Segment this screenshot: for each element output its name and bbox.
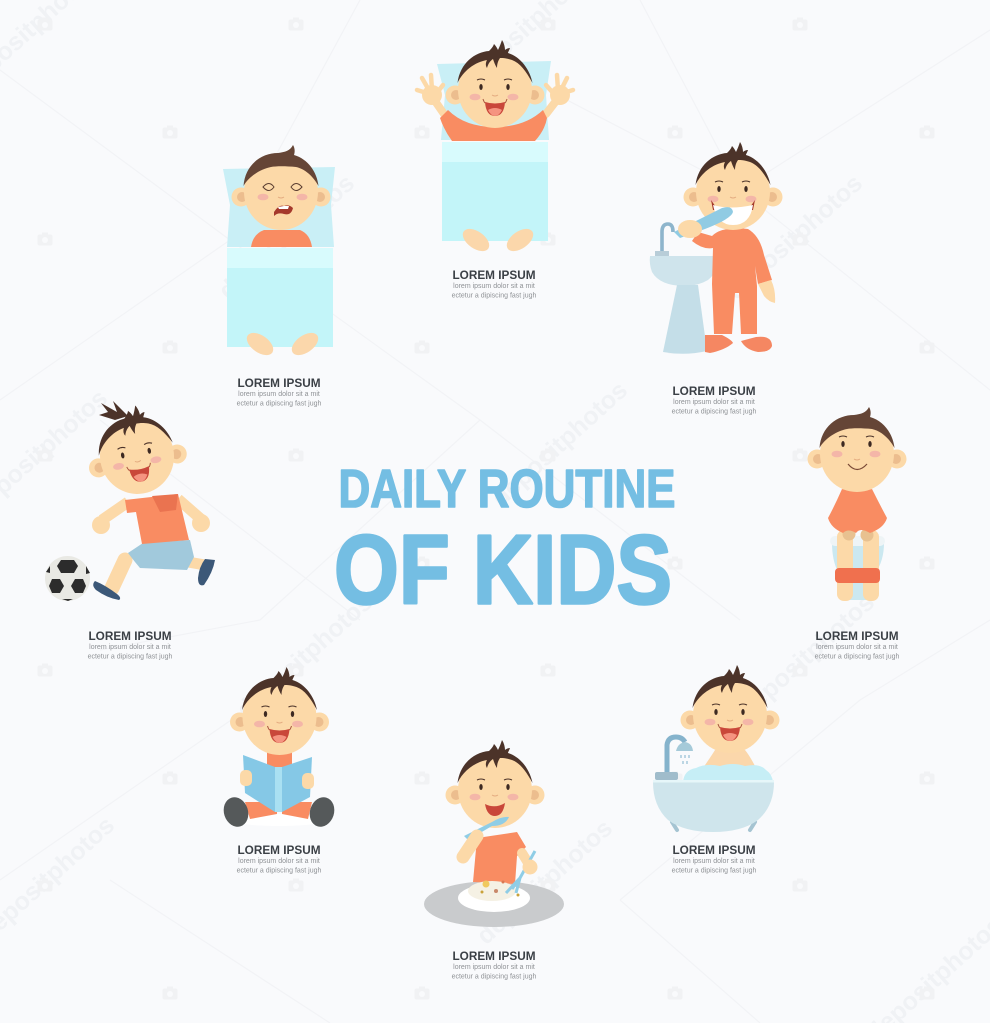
label: potty: lorem ipsum dolor sit a mit bbox=[816, 644, 898, 651]
head bbox=[680, 665, 780, 753]
feet bbox=[459, 224, 537, 256]
watermark: depositphotos bbox=[213, 169, 360, 305]
toothbrush and fist bbox=[674, 207, 733, 238]
legs bbox=[112, 560, 205, 588]
label: sleep: ectetur a dipiscing fast jugh bbox=[237, 400, 322, 408]
head bbox=[446, 740, 544, 828]
left arm bbox=[463, 836, 477, 857]
watermark: depositphotos bbox=[721, 169, 868, 305]
head bbox=[808, 407, 906, 492]
right arm bbox=[522, 853, 530, 866]
pajama bbox=[692, 228, 772, 334]
title: OF KIDS bbox=[334, 514, 672, 624]
faucet bbox=[655, 737, 693, 780]
illustration: boy brushing teeth bbox=[650, 142, 782, 354]
legs bbox=[837, 530, 879, 601]
illustration: boy reading bbox=[220, 667, 338, 830]
illustration: boy sleeping bbox=[223, 145, 335, 360]
label: reading bbox=[237, 843, 322, 874]
illustration: boy playing soccer bbox=[45, 398, 215, 601]
watermark: depositphotos bbox=[471, 814, 618, 950]
label: eating: ectetur a dipiscing fast jugh bbox=[452, 974, 537, 980]
label: eating: lorem ipsum dolor sit a mit bbox=[453, 964, 535, 971]
shorts bbox=[128, 540, 194, 570]
label: eating: LOREM IPSUM bbox=[452, 949, 536, 963]
label: reading: ectetur a dipiscing fast jugh bbox=[237, 868, 322, 874]
label: brush: LOREM IPSUM bbox=[672, 384, 756, 398]
illustration: boy eating bbox=[424, 740, 564, 927]
slippers bbox=[705, 335, 772, 353]
pillow bbox=[223, 167, 335, 247]
knees bbox=[842, 528, 874, 542]
label: soccer: lorem ipsum dolor sit a mit bbox=[89, 644, 171, 651]
watermark: depositphotos bbox=[231, 588, 378, 724]
watermark: depositphotos bbox=[733, 588, 880, 724]
title bbox=[334, 459, 676, 624]
shirt bbox=[440, 110, 547, 141]
head bbox=[684, 142, 782, 230]
foam bbox=[683, 764, 773, 782]
label: top bbox=[452, 268, 537, 300]
shoes bbox=[220, 794, 338, 830]
label: top: LOREM IPSUM bbox=[452, 268, 536, 282]
soccer ball bbox=[45, 556, 90, 601]
plate with rice bbox=[458, 880, 530, 912]
label: soccer bbox=[88, 629, 173, 660]
hands bbox=[240, 770, 314, 789]
label: brush: lorem ipsum dolor sit a mit bbox=[673, 399, 755, 406]
label: potty: LOREM IPSUM bbox=[816, 629, 898, 643]
feet bbox=[243, 328, 322, 360]
label: top: ectetur a dipiscing fast jugh bbox=[452, 292, 537, 300]
label: potty bbox=[815, 629, 900, 660]
label: soccer: ectetur a dipiscing fast jugh bbox=[88, 654, 173, 660]
bathtub bbox=[653, 780, 774, 832]
illustration: boy in bath bbox=[653, 665, 780, 832]
label: bath: LOREM IPSUM bbox=[672, 843, 756, 857]
label: bath: ectetur a dipiscing fast jugh bbox=[672, 868, 757, 874]
label: sleep bbox=[237, 376, 322, 408]
label: sleep: LOREM IPSUM bbox=[238, 376, 320, 390]
illustration: boy waking up in bed bbox=[417, 40, 573, 256]
blanket bbox=[442, 142, 548, 241]
shirt bbox=[125, 494, 189, 544]
label: potty: ectetur a dipiscing fast jugh bbox=[815, 654, 900, 660]
pillow bbox=[437, 61, 551, 140]
title: DAILY ROUTINE bbox=[338, 459, 676, 519]
watermark: depositphotos bbox=[486, 376, 633, 512]
label: bath: lorem ipsum dolor sit a mit bbox=[673, 858, 755, 865]
arms and hands bbox=[92, 499, 210, 534]
torso bbox=[828, 489, 887, 533]
pants bbox=[835, 568, 880, 583]
hair spikes bbox=[99, 401, 128, 420]
fist bbox=[522, 860, 538, 874]
arms and hands bbox=[417, 75, 573, 114]
label: soccer: LOREM IPSUM bbox=[88, 629, 172, 643]
shoes bbox=[93, 559, 215, 600]
sink bbox=[650, 251, 719, 354]
head bbox=[80, 398, 192, 502]
faucet bbox=[662, 224, 673, 254]
head bbox=[446, 40, 544, 128]
label: top: lorem ipsum dolor sit a mit bbox=[453, 283, 535, 290]
label: reading: LOREM IPSUM bbox=[238, 843, 320, 857]
label: brush bbox=[672, 384, 757, 416]
label: brush: ectetur a dipiscing fast jugh bbox=[672, 408, 757, 416]
label: reading: lorem ipsum dolor sit a mit bbox=[238, 858, 320, 865]
book bbox=[243, 755, 312, 812]
label: eating bbox=[452, 949, 537, 980]
blanket bbox=[227, 248, 333, 347]
fork bbox=[506, 851, 535, 893]
chest bbox=[703, 750, 756, 768]
hand bbox=[758, 280, 775, 303]
potty bbox=[830, 536, 885, 600]
shadow bbox=[231, 814, 327, 826]
shirt bbox=[473, 832, 526, 884]
table shadow bbox=[424, 881, 564, 927]
label: sleep: lorem ipsum dolor sit a mit bbox=[238, 391, 320, 398]
shirt bbox=[251, 230, 312, 247]
spoon bbox=[464, 817, 509, 840]
head bbox=[232, 145, 330, 230]
head bbox=[230, 667, 329, 755]
illustration: boy on potty bbox=[808, 407, 906, 601]
label: bath bbox=[672, 843, 757, 874]
collar and legs bbox=[245, 752, 312, 819]
